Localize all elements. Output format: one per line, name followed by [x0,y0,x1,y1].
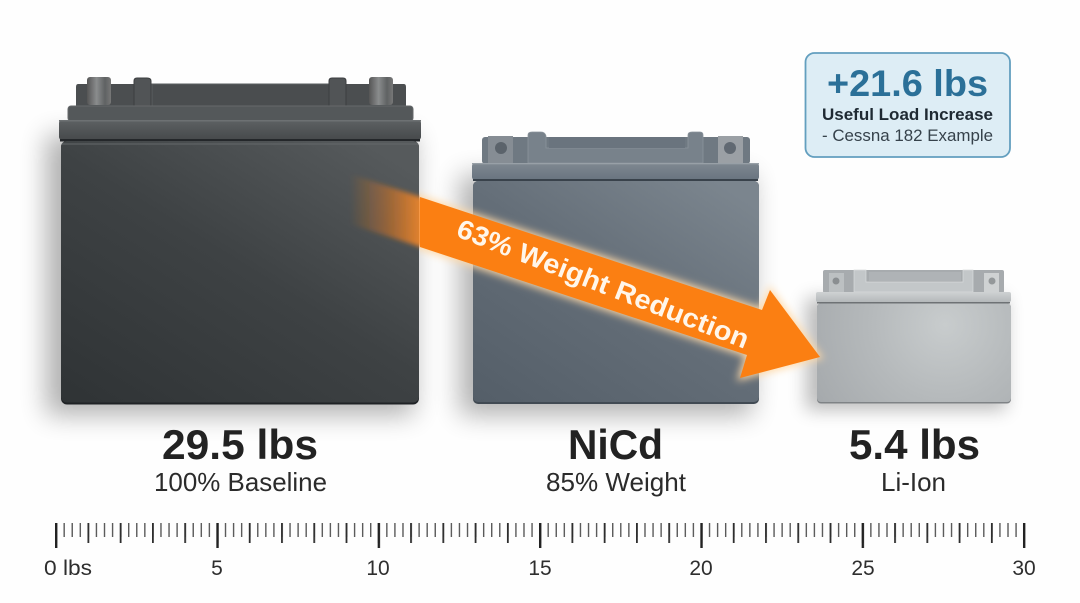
scale label: 25: 25 [851,557,875,580]
scale label: 15: 15 [528,557,552,580]
mounting ears [488,136,743,164]
weight scale ruler [44,523,1036,580]
label: Li-Ion: Li-Ion [881,467,946,497]
arrow: 63% weight reduction [350,174,820,378]
callout label: Useful Load Increase [822,105,993,124]
label: 5.4 lbs: 5.4 lbs [849,421,980,468]
scale label: 30: 30 [1012,557,1036,580]
scale label: 20: 20 [689,557,713,580]
label: 100% baseline: 100% Baseline [154,467,327,497]
scale label: 0 lbs: 0 lbs [44,557,92,580]
callout note: - Cessna 182 Example [822,127,993,145]
scale label: 10: 10 [366,557,390,580]
label: NiCd: NiCd [568,421,663,468]
mounting ears [829,273,999,293]
callout value: +21.6 lbs [827,63,988,104]
battery: Li-Ion [806,270,1011,410]
arrow label: 63% Weight Reduction [453,214,753,354]
label: 29.5 lbs: 29.5 lbs [162,421,318,468]
label: 85% weight: 85% Weight [546,467,687,497]
battery: NiCd [460,132,759,415]
scale label: 5: 5 [211,557,223,580]
battery: lead-acid 29.5 lbs [46,77,421,415]
callout: useful load increase [806,53,1010,157]
terminal posts [87,77,393,105]
